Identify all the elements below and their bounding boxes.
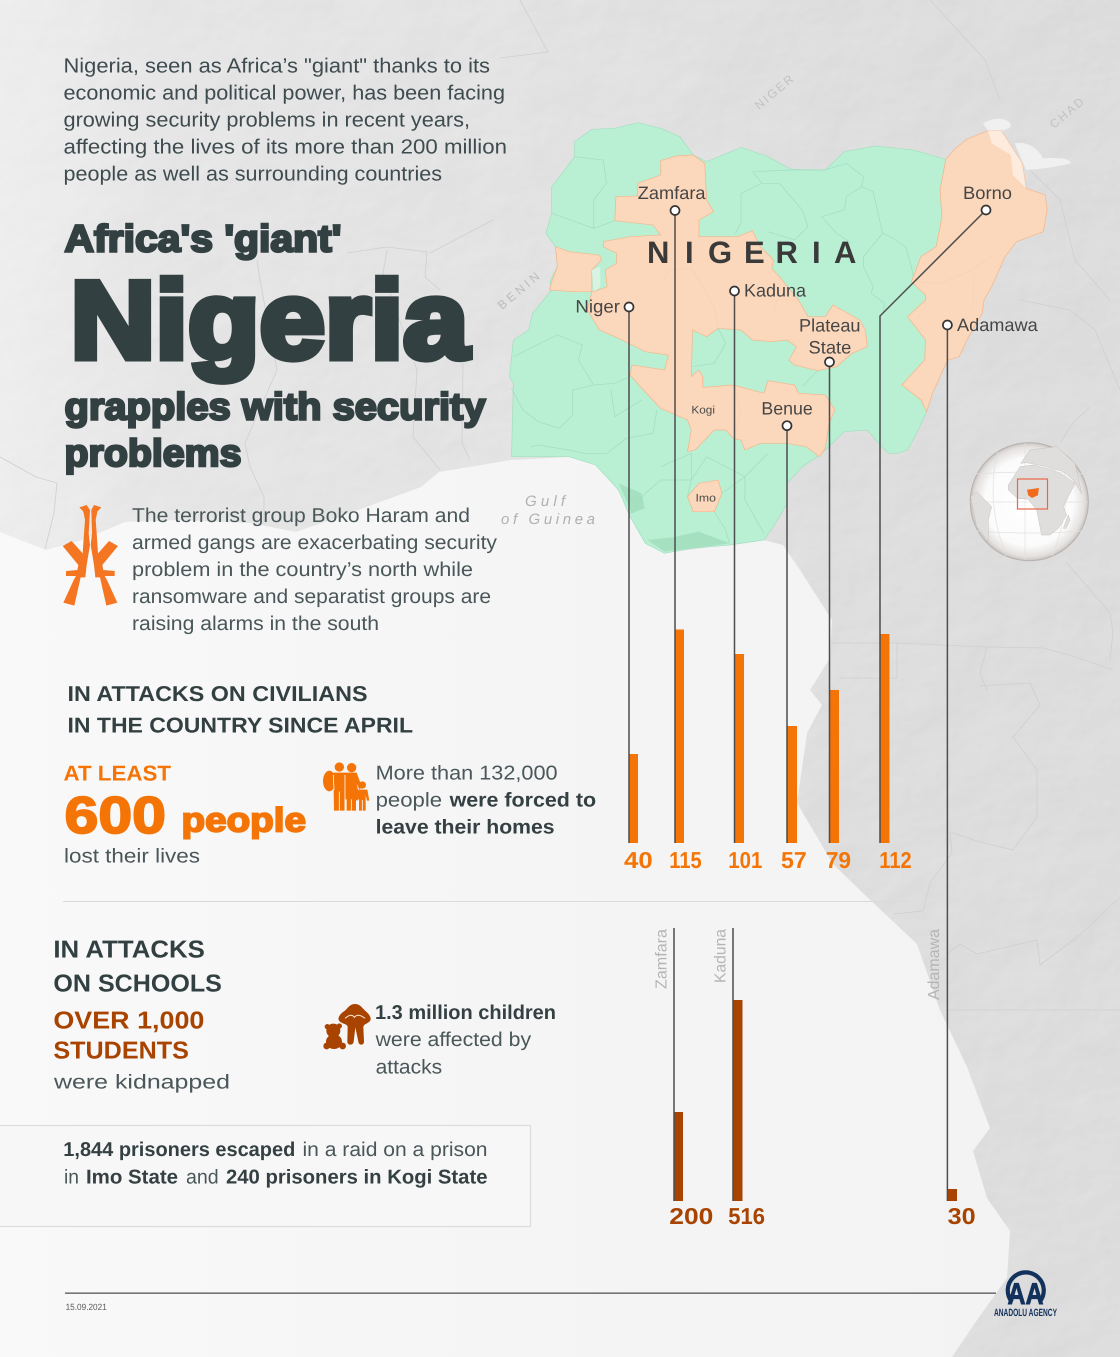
map: Lake Chad water outside border [983, 119, 1071, 170]
chart column: Plateau State 79 [799, 316, 860, 873]
chart column: Niger 40: Niger [575, 297, 620, 317]
chart column: Kaduna 516: Kaduna [712, 929, 730, 983]
callout text: Imo State [86, 1166, 178, 1188]
background: ocean [0, 457, 1010, 1357]
heading: attacks on civilians: IN THE COUNTRY SINCE APRIL [68, 713, 413, 737]
text block: terrorist groups: raising alarms in the south [132, 613, 379, 635]
footer rule [65, 1292, 996, 1294]
text block: terrorist groups: The terrorist group Boko Haram and [132, 505, 470, 527]
map: highlighted state Imo [687, 480, 722, 512]
heading: attacks on schools: ON SCHOOLS [53, 970, 222, 997]
intro paragraph: affecting the lives of its more than 200 million [64, 136, 507, 158]
chart column: Zamfara 200: Zamfara [654, 929, 670, 989]
label: CHAD: CHAD [1047, 95, 1087, 131]
callout: prisoners escaped [0, 1126, 530, 1226]
chart column: Borno 112 [879, 183, 1012, 873]
logo arc [1008, 1272, 1044, 1302]
globe: locator frame [1018, 479, 1048, 509]
chart column: Borno 112: 112 [879, 847, 912, 873]
chart column: Kaduna 101: 101 [728, 847, 762, 873]
heading: attacks on schools: IN ATTACKS [53, 937, 205, 964]
heading: attacks on civilians: IN ATTACKS ON CIVILIANS [68, 682, 368, 706]
chart column: Adamawa 30: 30 [948, 1203, 976, 1229]
stat caption: were kidnapped [53, 1071, 230, 1093]
map: highlighted states central [550, 155, 867, 457]
stat unit: people: people [182, 802, 306, 840]
callout text [63, 1139, 488, 1188]
map: Kainji lake [592, 267, 600, 292]
chart column: Zamfara 200: 200 [669, 1203, 713, 1229]
chart column: Benue 57 [761, 398, 813, 873]
intro paragraph: growing security problems in recent years, [64, 108, 470, 132]
stat: at least 600 people [64, 762, 306, 867]
text block: forced to leave [376, 762, 596, 838]
stat caption: lost their lives [64, 845, 200, 867]
intro paragraph: Nigeria, seen as Africa’s "giant" thanks to its [64, 54, 490, 78]
globe: Nigeria highlight [1028, 488, 1038, 498]
icon: displaced family [323, 762, 369, 811]
label: Kogi: Kogi [691, 404, 715, 416]
title [64, 218, 486, 475]
text block: terrorist groups [132, 505, 497, 635]
text block: children affected [375, 1002, 556, 1078]
chart column: Adamawa 30 [926, 315, 1039, 1229]
globe continents [971, 447, 1082, 542]
stat number: 600: 600 [64, 787, 166, 845]
chart column: Zamfara 115: Zamfara [638, 183, 706, 203]
heading: attacks on civilians [68, 682, 413, 737]
intro paragraph: people as well as surrounding countries [64, 162, 442, 186]
title line: problems: problems [64, 433, 242, 475]
stat number: OVER 1,000 [53, 1008, 204, 1035]
title line: Africa's giant: Africa's 'giant' [64, 218, 342, 260]
background: neighbouring country borders [0, 0, 1120, 1010]
label: Gulf of Guinea: Gulf [525, 493, 567, 510]
text block: terrorist groups: armed gangs are exacerbating security [132, 532, 497, 554]
title line: Nigeria: Nigeria [70, 259, 469, 382]
chart column: Benue 57: Benue [761, 398, 813, 418]
label: Gulf of Guinea: of Guinea [501, 511, 595, 528]
callout text: and [186, 1166, 219, 1188]
text block: children affected: were affected by [375, 1029, 531, 1051]
label: Gulf of Guinea [501, 493, 595, 528]
text block: forced to leave: leave their homes [376, 816, 555, 838]
chart column: Niger 40: 40 [624, 847, 653, 873]
text block: children affected: 1.3 million children [375, 1002, 556, 1024]
text block: forced to leave: More than 132,000 [376, 762, 558, 784]
stat: over 1,000 students [53, 1008, 230, 1093]
text block: forced to leave: were forced to [449, 790, 596, 812]
logo letters: AA [1008, 1278, 1044, 1311]
label: NIGER: NIGER [752, 72, 796, 112]
globe grid lines [970, 443, 1088, 560]
stat label: at least: AT LEAST [64, 762, 171, 786]
intro paragraph: economic and political power, has been facing [64, 82, 505, 104]
chart column: Adamawa 30: Adamawa [957, 315, 1039, 335]
stat unit: STUDENTS [53, 1038, 189, 1065]
text block: children affected: attacks [376, 1056, 442, 1078]
text block: forced to leave: people [376, 790, 442, 812]
globe locator [970, 443, 1088, 561]
icon: child and teddy bear [323, 1004, 371, 1049]
map: highlighted state inner borders [665, 257, 992, 438]
map: Nigeria [510, 119, 1071, 553]
label: BENIN: BENIN [495, 269, 542, 312]
text block: terrorist groups: ransomware and separatist groups are [132, 586, 491, 608]
logo: Anadolu Agency [994, 1272, 1057, 1319]
chart column: Niger 40 [575, 297, 653, 873]
chart column: Borno 112: Borno [963, 183, 1012, 203]
icon: crossed rifles [63, 505, 118, 606]
callout text: in a raid on a prison [302, 1139, 488, 1161]
label: NIGERIA: NIGERIA [647, 235, 856, 270]
callout text: in [64, 1166, 79, 1188]
chart column: Benue 57: 57 [781, 847, 807, 873]
chart column: Plateau State 79: State [808, 337, 851, 357]
date: 15.09.2021 [66, 1302, 107, 1312]
chart column: Zamfara 115: 115 [669, 847, 702, 873]
globe sphere [970, 443, 1088, 561]
map: country base shape [510, 123, 959, 553]
chart column: Adamawa 30: Adamawa [926, 929, 943, 1000]
chart column: Kaduna 516 [712, 928, 765, 1229]
chart column: Kaduna 101 [728, 281, 807, 873]
map: mangrove delta [619, 483, 730, 552]
intro paragraph [64, 54, 507, 186]
map: state borders [511, 157, 913, 543]
map: highlighted states east [902, 131, 1047, 412]
chart column: Zamfara 200 [654, 928, 713, 1229]
callout text: 240 prisoners in Kogi State [226, 1166, 488, 1188]
chart column: Kaduna 101: Kaduna [744, 281, 807, 301]
heading: attacks on schools [53, 937, 222, 997]
title line: grapples with security: grapples with security [64, 386, 486, 428]
text block: terrorist groups: problem in the country’s north while [132, 559, 473, 581]
label: Imo: Imo [696, 493, 716, 505]
chart column: Plateau State 79: 79 [826, 847, 851, 873]
chart column: Kaduna 516: 516 [728, 1203, 765, 1229]
chart column: Plateau State 79: Plateau [799, 316, 860, 336]
logo wordmark: ANADOLU AGENCY [994, 1307, 1057, 1319]
callout text: 1,844 prisoners escaped [63, 1139, 295, 1161]
chart column: Zamfara 115 [638, 183, 706, 873]
map: Lake Chad water inside border [988, 131, 1026, 188]
callout box [0, 1126, 530, 1226]
